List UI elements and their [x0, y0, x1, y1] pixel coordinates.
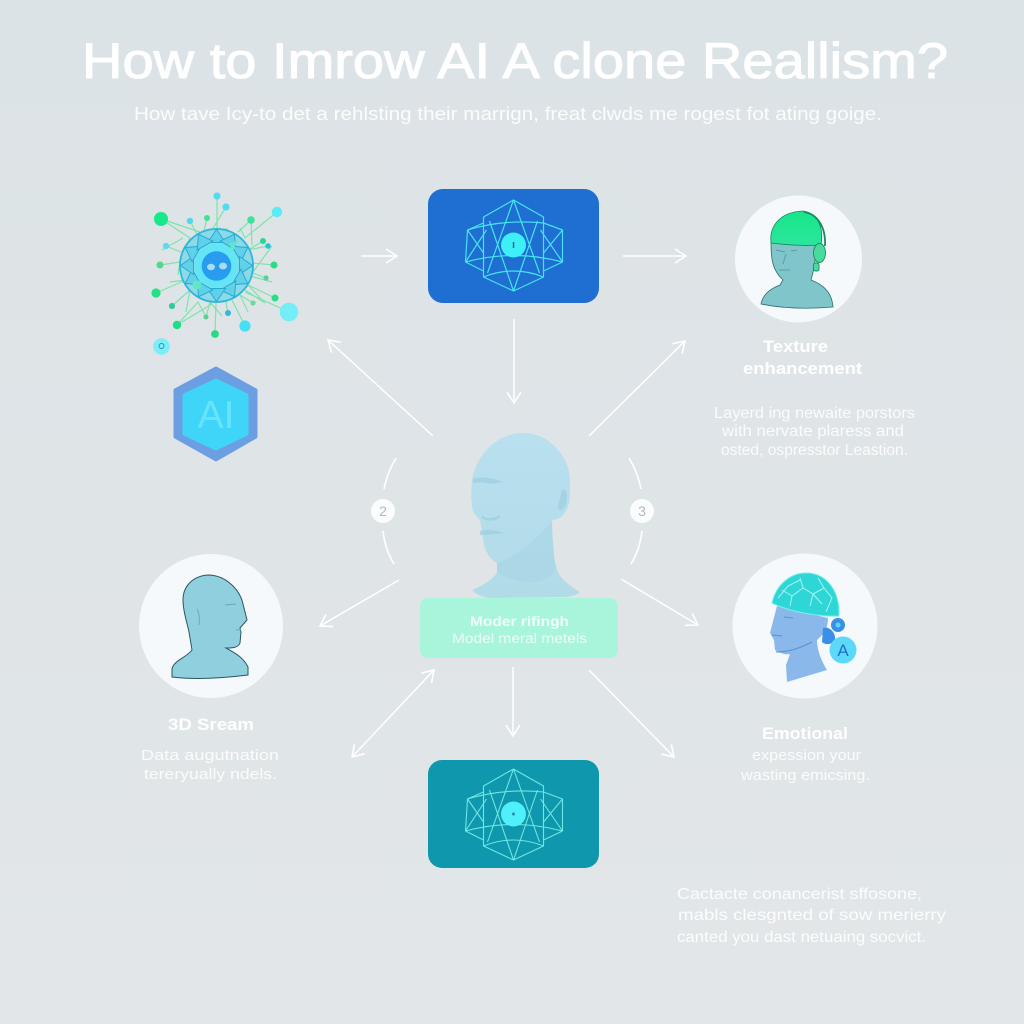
central head — [471, 433, 580, 598]
panel: texture portrait — [735, 196, 862, 322]
small node — [831, 618, 845, 632]
arrow: blue card to head — [513, 319, 515, 403]
heading: texture enhancement: Texture — [763, 337, 828, 356]
panel: 3D stream portrait — [139, 554, 283, 698]
arrow: blue card to texture — [623, 255, 686, 257]
card node — [501, 232, 526, 258]
arrow: double-headed lower left — [352, 670, 434, 757]
network links — [156, 196, 289, 334]
text: texture description: with nervate plaress and — [721, 423, 904, 440]
card geometry — [466, 200, 562, 291]
globe ring — [180, 229, 253, 302]
panel: model refining label — [420, 598, 618, 658]
arrow: network to blue card — [361, 255, 397, 257]
A badge: A — [837, 641, 849, 660]
facial details — [197, 604, 241, 630]
step badge 2: 2 — [379, 503, 387, 519]
A badge — [830, 636, 856, 664]
arrow: head to 3D stream — [320, 580, 399, 626]
text: bottom right description: Cactacte conancerist sffosone, — [677, 886, 922, 903]
step badge 3 — [630, 499, 654, 523]
heading: 3D stream: 3D Sream — [168, 715, 254, 734]
arrow: model box to teal card — [512, 667, 514, 736]
text: bottom right description: mabls clesgnted of sow merierry — [678, 907, 946, 924]
text: texture description: osted, ospresstor Leastion. — [721, 442, 908, 459]
network nodes — [151, 192, 298, 338]
globe triangles — [180, 230, 252, 302]
heading: texture enhancement — [743, 337, 862, 378]
step badge 2 — [371, 499, 395, 523]
headphones — [804, 212, 826, 271]
blue head — [770, 606, 828, 682]
icon: small cyan dot — [153, 338, 170, 355]
arrow: head to network — [328, 340, 433, 436]
text: emotional description: wasting emicsing. — [740, 767, 870, 784]
panel: model refining label: Model meral metels — [452, 631, 587, 646]
heading: texture enhancement: enhancement — [743, 359, 862, 378]
card geometry — [466, 769, 562, 860]
text: emotional description: expession your — [752, 747, 861, 764]
bust — [172, 575, 248, 678]
panel: model refining label: Moder rifingh — [470, 613, 569, 629]
text: emotional description — [740, 747, 870, 784]
globe core — [194, 244, 238, 288]
arrow: head to emotional — [621, 579, 698, 625]
heading: emotional: Emotional — [762, 724, 848, 743]
green hair — [771, 211, 822, 245]
arrow: lower right — [589, 670, 674, 757]
subtitle: How tave Icy-to det a rehlsting their marrign, freat clwds me rogest fot ating goige. — [134, 103, 882, 124]
text: 3D stream description: tereryually ndels. — [144, 766, 277, 783]
card node — [501, 802, 526, 826]
icon: AI hexagon badge — [175, 368, 256, 460]
arrow: head to texture — [589, 341, 685, 436]
text: texture description: Layerd ing newaite porstors — [714, 405, 915, 422]
decorative arcs left — [383, 458, 396, 564]
text: 3D stream description: Data augutnation — [141, 747, 279, 764]
text: bottom right description: canted you dast netuaing socvict. — [677, 929, 926, 946]
facial details — [772, 617, 812, 652]
panel: blue network card — [428, 189, 599, 303]
text: bottom right description — [677, 886, 946, 946]
face shading — [473, 478, 567, 582]
ear accent — [822, 628, 835, 644]
panel: emotional portrait — [732, 554, 878, 698]
icon: neural network globe — [151, 192, 298, 338]
panel: teal network card — [428, 760, 599, 868]
decorative arcs right — [629, 458, 642, 564]
text: texture description — [714, 405, 915, 459]
head silhouette — [471, 433, 580, 598]
brain cap — [772, 573, 839, 616]
icon: AI hexagon badge: AI — [198, 394, 234, 437]
green accent nodes — [192, 240, 238, 290]
facial details — [776, 250, 797, 270]
title: How to Imrow AI A clone Reallism? — [82, 33, 948, 89]
text: 3D stream description — [141, 747, 279, 783]
step badge 3: 3 — [638, 503, 646, 519]
bust — [761, 243, 833, 308]
